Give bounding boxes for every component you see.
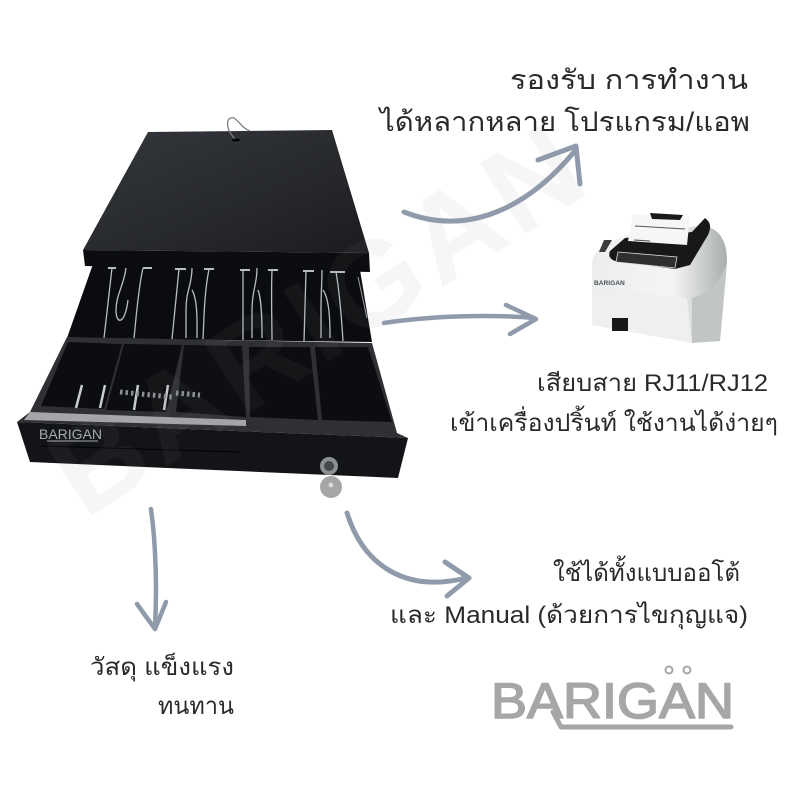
text: software support: ได้หลากหลาย โปรแกรม/แอพ: [378, 107, 750, 137]
lock and key: [320, 457, 338, 475]
icon: receipt printer: [592, 213, 727, 343]
arrow: top, to software text: [404, 146, 580, 221]
text: auto and manual: [390, 555, 748, 630]
arrow: down, to material text: [137, 509, 166, 629]
tray side highlight: [358, 277, 367, 318]
drawer lid: [83, 130, 369, 253]
text: material: วัสดุ แข็งแรง: [90, 652, 234, 682]
control panel: [609, 218, 710, 269]
coin clips: [104, 268, 345, 341]
small compartments: [41, 342, 122, 409]
text: software support: [378, 65, 750, 137]
printer brand: BARIGAN: [594, 280, 625, 287]
lower tray frame: [17, 337, 408, 438]
text: auto and manual: ใช้ได้ทั้งแบบออโต้: [553, 555, 740, 587]
text: material: [90, 652, 234, 720]
watermark: BARIGAN: [25, 95, 612, 542]
power switch: [612, 318, 628, 331]
drawer front panel: [17, 422, 408, 478]
text: printer connection: [450, 370, 778, 437]
text: printer connection: เสียบสาย RJ11/RJ12: [537, 370, 768, 397]
text: auto and manual: และ Manual (ด้วยการไขกุญแจ): [390, 601, 748, 630]
text: material: ทนทาน: [158, 693, 234, 720]
printer body: [592, 226, 727, 343]
upper tray: [67, 264, 372, 342]
paper side slot: [599, 240, 612, 252]
front rim: [24, 412, 246, 426]
text: printer connection: เข้าเครื่องปริ้นท์ ใช้งานได้ง่ายๆ: [450, 405, 778, 437]
drawer brand label: BARIGAN: [39, 426, 102, 442]
arrow: curve, to manual text: [347, 513, 469, 596]
function buttons: [616, 252, 677, 268]
coin separators: [76, 385, 168, 410]
logo: Barigan: BARIGAN: [491, 673, 734, 729]
arrow: middle, to printer: [384, 305, 536, 334]
lid wire handle: [228, 118, 250, 140]
text: software support: รองรับ การทำงาน: [510, 65, 748, 95]
icon: cash drawer: [17, 118, 408, 498]
receipt paper: [628, 214, 690, 245]
